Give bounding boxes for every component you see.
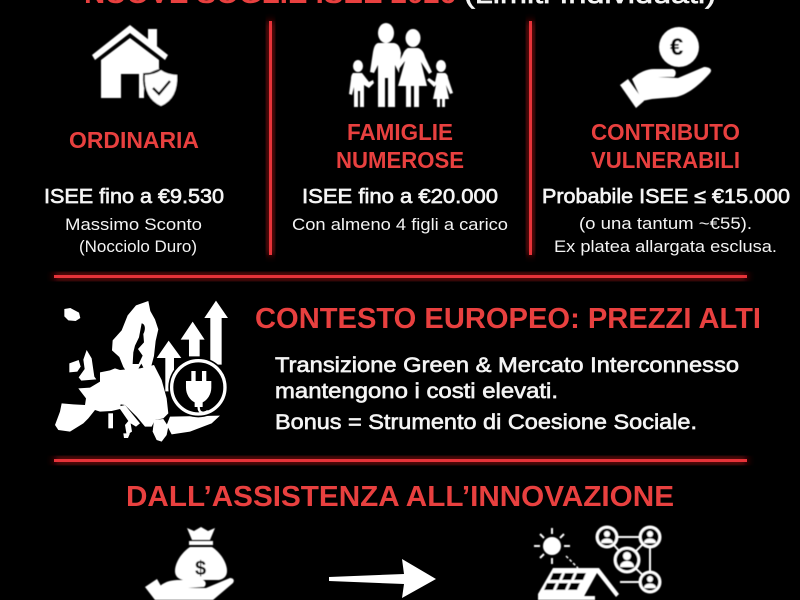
note: ordinaria xyxy=(65,215,202,256)
heading: ordinaria: ORDINARIA xyxy=(69,127,199,153)
icon: hand with euro coin: € xyxy=(670,34,683,61)
icon: hand holding money bag: $ xyxy=(195,558,206,580)
body text: contesto europeo: mantengono i costi elevati. xyxy=(275,379,558,403)
threshold: ordinaria: ISEE fino a €9.530 xyxy=(44,186,224,208)
body text: contesto europeo: Bonus = Strumento di Coesione Sociale. xyxy=(275,410,697,434)
panel: dall'assistenza all'innovazione xyxy=(126,481,674,600)
heading: contesto europeo: CONTESTO EUROPEO: PREZZI ALTI xyxy=(255,303,761,335)
note: ordinaria: (Nocciolo Duro) xyxy=(79,237,197,256)
icon: family xyxy=(349,23,453,107)
note: contributo vulnerabili xyxy=(554,214,777,256)
threshold: contributo vulnerabili: Probabile ISEE ≤ €15.000 xyxy=(542,186,790,208)
note: contributo vulnerabili: (o una tantum ~€55). xyxy=(579,214,752,233)
divider: vertical left xyxy=(268,21,273,255)
icon: house with shield xyxy=(92,25,178,107)
threshold: famiglie numerose: ISEE fino a €20.000 xyxy=(302,186,498,208)
title (cropped at top edge) xyxy=(84,0,716,9)
divider: horizontal lower xyxy=(54,458,747,463)
heading: famiglie numerose: NUMEROSE xyxy=(336,147,464,173)
body text: contesto europeo: Transizione Green & Mercato Interconnesso xyxy=(275,353,739,377)
panel: contributo vulnerabili xyxy=(542,27,790,256)
panel: contesto europeo xyxy=(55,301,761,442)
heading: contributo vulnerabili: CONTRIBUTO xyxy=(591,119,740,145)
heading: dall'assistenza all'innovazione: DALL’ASSISTENZA ALL’INNOVAZIONE xyxy=(126,481,674,513)
heading: contributo vulnerabili: VULNERABILI xyxy=(591,147,740,173)
icon: hand holding money bag xyxy=(145,527,234,600)
body text: contesto europeo xyxy=(275,353,739,434)
divider: horizontal upper xyxy=(54,274,747,279)
heading: famiglie numerose: FAMIGLIE xyxy=(347,119,453,145)
icon: europe map with rising arrows and plug xyxy=(55,301,228,442)
icon: hand with euro coin xyxy=(620,27,711,108)
panel: famiglie numerose xyxy=(292,23,508,234)
heading: contributo vulnerabili xyxy=(591,119,740,173)
note: famiglie numerose: Con almeno 4 figli a carico xyxy=(292,215,508,234)
icon: solar house and community network xyxy=(534,527,660,600)
heading: famiglie numerose xyxy=(336,119,464,173)
note: ordinaria: Massimo Sconto xyxy=(65,215,202,234)
arrow: assistance to innovation xyxy=(329,559,436,598)
panel: ordinaria xyxy=(44,25,224,256)
divider: vertical right xyxy=(528,21,533,255)
note: contributo vulnerabili: Ex platea allargata esclusa. xyxy=(554,237,777,256)
